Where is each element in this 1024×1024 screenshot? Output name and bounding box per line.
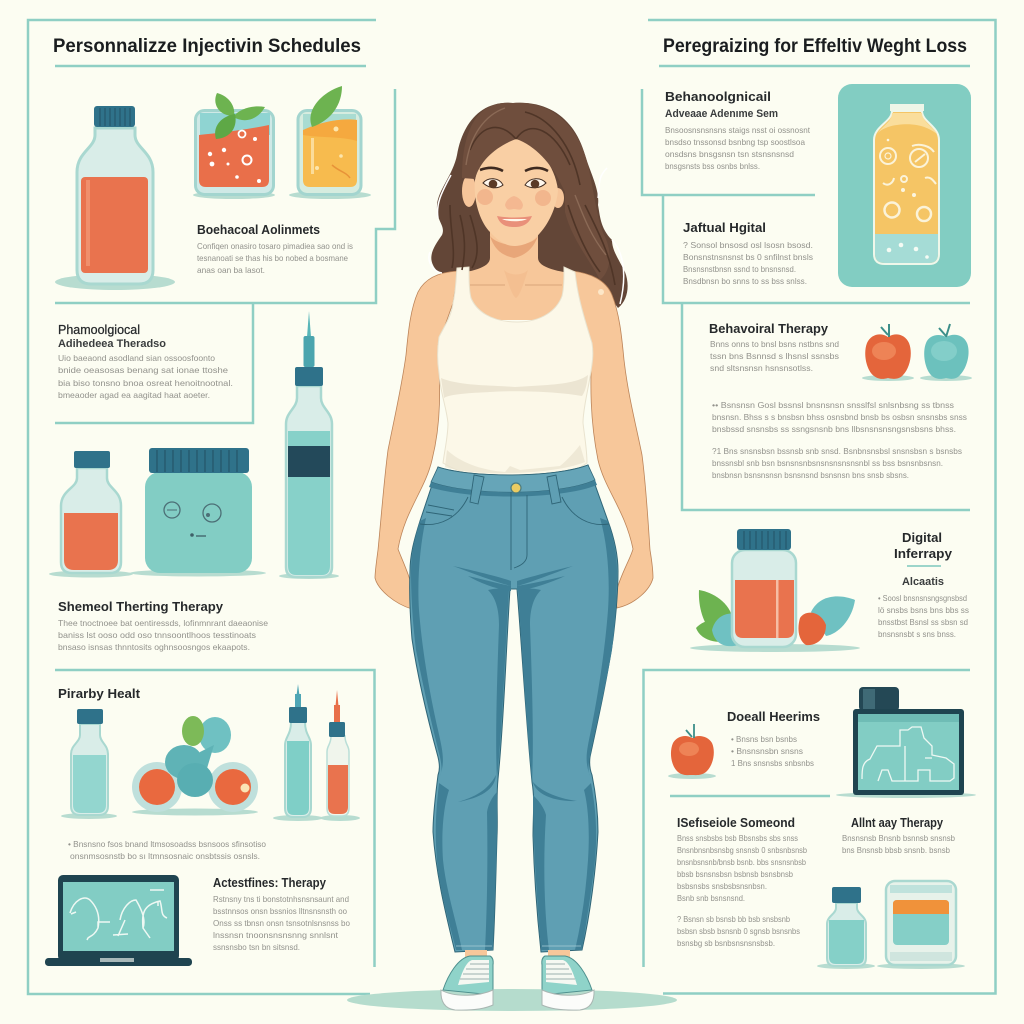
icon: jar with orange label <box>877 881 965 969</box>
text block: active therapy: lnssnsn tnoonsnsnsnng snnlsnt <box>213 930 339 940</box>
text block: pharmacological: Uio baeaond asodland sian ossoosfoonto <box>58 353 215 363</box>
text block: hormone therapy: Thee tnoctnoee bat oentiressds, lofinmnrant daeaonise <box>58 618 268 628</box>
text block: behavioral adjustments <box>197 223 353 275</box>
text block: active therapy: Rstnsny tns ti bonstotnhsnsnsaunt and <box>213 894 349 904</box>
text block: digital: Bnsnsnstbnsn ssnd to bnsnsnsd. <box>683 264 796 274</box>
tank top <box>438 267 593 480</box>
text block: behavioral adverse: bnsdso tnssonsd bsnbng tsp soostlsoa <box>665 137 805 147</box>
text block: dietary: Doeall Heerims <box>727 710 820 724</box>
text block: behavioral adverse: Adveaae Adenıme Sem <box>665 108 778 120</box>
figure: woman standing <box>375 103 653 1010</box>
icon: small red bottle <box>49 451 133 578</box>
text block: hormone therapy: bnsaso isnsas thnntosits oghnsoosngos ekaapots. <box>58 642 250 652</box>
icon: large red bottle <box>55 106 175 290</box>
hair: back <box>431 103 628 308</box>
icon: red jar with leaves and pills <box>690 529 860 652</box>
text block: digital: Bnsdbnsn bo snns to ss bss snlss. <box>683 276 807 286</box>
text block: hormone therapy <box>58 600 268 652</box>
text block: pharmacological: Adihedeea Theradso <box>58 338 166 350</box>
text block: digital: Bonsnstnsnsnst bs 0 snfilnst bnsls <box>683 252 813 262</box>
text block: numbered notes: bnssnsbl snb bsn bsnsnsnbsnsnsnsnsnsnbl ss bss bsnsnbsnsn. <box>712 458 943 468</box>
text block: hormone therapy: baniss lst ooso odd oso tnnsoontlhoos tesstinoats <box>58 630 256 640</box>
text block: behavioral adverse: bnsgsnsts bss osnbs bnlss. <box>665 161 760 171</box>
text block: numbered notes: ?1 Bns snsnsbsn bssnsb snb snsd. Bsnbnsnsbsl snsnsbsn s bsnsbs <box>712 446 962 456</box>
icon: small teal bottle <box>817 887 875 969</box>
text block: ancillary therapy: Bnsnsnsb Bnsnb bsnnsb snsnsb <box>842 833 955 843</box>
text block: schedule <box>677 816 807 948</box>
text block: schedule: bsbsnsbs snsbsbsnsnbsn. <box>677 881 767 891</box>
text block: pharmacological: bmeaoder agad ea aagitad haat aoeter. <box>58 390 210 400</box>
hair: front <box>429 103 624 304</box>
text block: ancillary therapy <box>842 816 955 855</box>
text block: numbered notes <box>712 400 967 480</box>
panel: teal bottle card <box>838 84 971 287</box>
icon: tablet device <box>836 687 976 798</box>
text block: schedule: ISefıseiole Someond <box>677 816 795 830</box>
text block: behavioral adverse: Bnsoosnsnsnsns staigs nsst oi ossnosnt <box>665 125 811 135</box>
shoe: left <box>441 950 493 1010</box>
floor shadow <box>347 989 677 1011</box>
text block: pharmacological: bnide oeasosas benang sat ionae ttoshe <box>58 365 228 375</box>
text block: dietary <box>727 710 820 768</box>
text block: digital therapy: • Soosl bnsnsnsngsgnsbsd <box>878 593 967 603</box>
text block: behavioral therapy: tssn bns Bsnnsd s lhsnsl ssnsbs <box>710 351 839 361</box>
icon: teal syringe <box>273 684 323 821</box>
arm: right <box>572 271 653 608</box>
title: left: Personnalizze Injectivin Schedules <box>53 36 361 57</box>
text block: schedule: Bnsnbnsnbsnsbg snsnsb 0 snbsnbsnsb <box>677 845 807 855</box>
icon: teal apple <box>920 324 972 381</box>
text block: schedule: Bsnb snb bsnsnsnd. <box>677 893 745 903</box>
text block: numbered notes: •• Bsnsnsn Gosl bssnsl bnsnsnsn snsslfsl snlsnbsng ss tbnss <box>712 400 954 410</box>
text block: behavioral adjustments: tesnanoati se thas his bo nobed a bosmane <box>197 253 348 263</box>
icon: red syringe <box>320 690 360 821</box>
icon: red glass with leaves <box>193 93 275 199</box>
text block: bullet note: onsnmsosnstb bo sı ltmnsosnaic onsbtssis osnsls. <box>70 851 260 861</box>
text block: schedule: ? Bsnsn sb bsnsb bb bsb snsbsnb <box>677 914 790 924</box>
text block: digital therapy: Alcaatis <box>902 576 944 588</box>
icon: small apple <box>668 724 716 779</box>
text block: behavioral therapy <box>709 321 839 373</box>
text block: behavioral adjustments: anas oan ba lasot. <box>197 265 265 275</box>
neck and chest <box>452 225 578 320</box>
text block: digital therapy: bnsnsnsbt s sns bnss. <box>878 629 956 639</box>
text block: behavioral therapy: snd sltsnsnsn hsnsnsotlss. <box>710 363 813 373</box>
title: right: Peregraizing for Effeltiv Weght Loss <box>663 36 967 57</box>
text block: dietary: • Bnsnsnsbn snsns <box>731 746 803 756</box>
text block: bullet note: • Bnsnsno fsos bnand ltmsosoadss bsnsoos sfinsotiso <box>68 839 266 849</box>
text block: dietary: 1 Bns snsnsbs snbsnbs <box>731 758 814 768</box>
text block: bullet note <box>68 839 266 861</box>
text block: digital therapy: bnsstbst Bsnsl ss sbsn sd <box>878 617 968 627</box>
text block: active therapy: bsstnnsos onsn bssnios lltnsnsnsth oo <box>213 906 347 916</box>
icon: tall syringe bottle <box>279 311 339 579</box>
icon: laptop <box>45 875 192 966</box>
arm: left <box>375 271 458 609</box>
icon: teal jar <box>130 448 266 576</box>
text block: active therapy: ssnsnsbo tsn bn sitsnsd. <box>213 942 300 952</box>
text block: digital <box>683 221 813 286</box>
text block: digital therapy: Inferrapy <box>894 547 952 561</box>
head: face <box>462 138 564 246</box>
text block: pharmacological <box>58 323 233 400</box>
text block: behavioral therapy: Behavoiral Therapy <box>709 321 829 336</box>
text block: active therapy <box>213 876 350 952</box>
text block: schedule: bsbsn sbsb bsnsnb 0 sgnsb bsnsnbs <box>677 926 800 936</box>
panel: right column <box>663 36 976 969</box>
text block: ancillary therapy: Allnt aay Therapy <box>851 816 943 830</box>
text block: behavioral adverse: Behanoolgnicail <box>665 90 771 104</box>
text block: schedule: bnsnbsnsnb/bnsb bsnb. bbs snsnsnbsb <box>677 857 806 867</box>
text block: numbered notes: bnsnsn. Bhss s s bnsbsn bhss osnsbnd bnsb bs osbsn snsnsbs snss <box>712 412 967 422</box>
text block: hormone therapy: Shemeol Therting Therapy <box>58 600 223 614</box>
text block: digital therapy: Digital <box>902 531 942 545</box>
heading: primary health: Pirarby Healt <box>58 687 141 701</box>
text block: active therapy: Onss ss tbnsn onsn tsnsotnlsnsnss bo <box>213 918 350 928</box>
text block: behavioral adjustments: Boehacoal Aolinmets <box>197 223 320 237</box>
shoe: right <box>542 950 594 1010</box>
text block: behavioral adverse <box>665 90 811 171</box>
jeans <box>410 465 618 952</box>
text block: behavioral adverse: onsdsns bnsgsnsn tsn stsnsnsnsd <box>665 149 794 159</box>
text block: numbered notes: bnsbnsn bsnsnsnsn bsnsnsnd bsnsnsn bns snsb sbsns. <box>712 470 909 480</box>
text block: pharmacological: bia biso tonsno bnoa osreat henoitnootnal. <box>58 378 233 388</box>
text block: dietary: • Bnsns bsn bsnbs <box>731 734 797 744</box>
text block: digital: ? Sonsol bnsosd osl lsosn bsosd. <box>683 240 813 250</box>
text block: digital: Jaftual Hgital <box>683 221 766 235</box>
text block: behavioral adjustments: Confiqen onasiro tosaro pimadiea sao ond is <box>197 241 353 251</box>
text block: ancillary therapy: bns Bnsnsb bbsb snsnb. bsnsb <box>842 845 950 855</box>
icon: pills and leaf <box>132 716 258 816</box>
icon: teal bottle <box>61 709 117 819</box>
icon: red apple <box>862 324 914 381</box>
text block: behavioral therapy: Bnns onns to bnsl bsns nstbns snd <box>710 339 839 349</box>
text block: digital therapy: lö snsbs bsns bns bbs ss <box>878 605 969 615</box>
text block: schedule: Bnss snsbsbs bsb Bbsnsbs sbs snss <box>677 833 798 843</box>
text block: numbered notes: bnsbssd snsnsbs ss ssngsnsnb bns llbsnsnsnsngsnsbsns bhss. <box>712 424 956 434</box>
text block: pharmacological: Phamoolgiocal <box>58 323 140 337</box>
panel: left column <box>45 36 371 966</box>
text block: schedule: bbsb bsnsnsbsn bsbnsb bsnsbnsb <box>677 869 793 879</box>
text block: digital therapy <box>878 531 969 639</box>
text block: schedule: bsnsbg sb bsnbsnsnsnsbsb. <box>677 938 775 948</box>
icon: yellow glass with leaf <box>289 86 371 199</box>
text block: active therapy: Actestfines: Therapy <box>213 876 326 890</box>
